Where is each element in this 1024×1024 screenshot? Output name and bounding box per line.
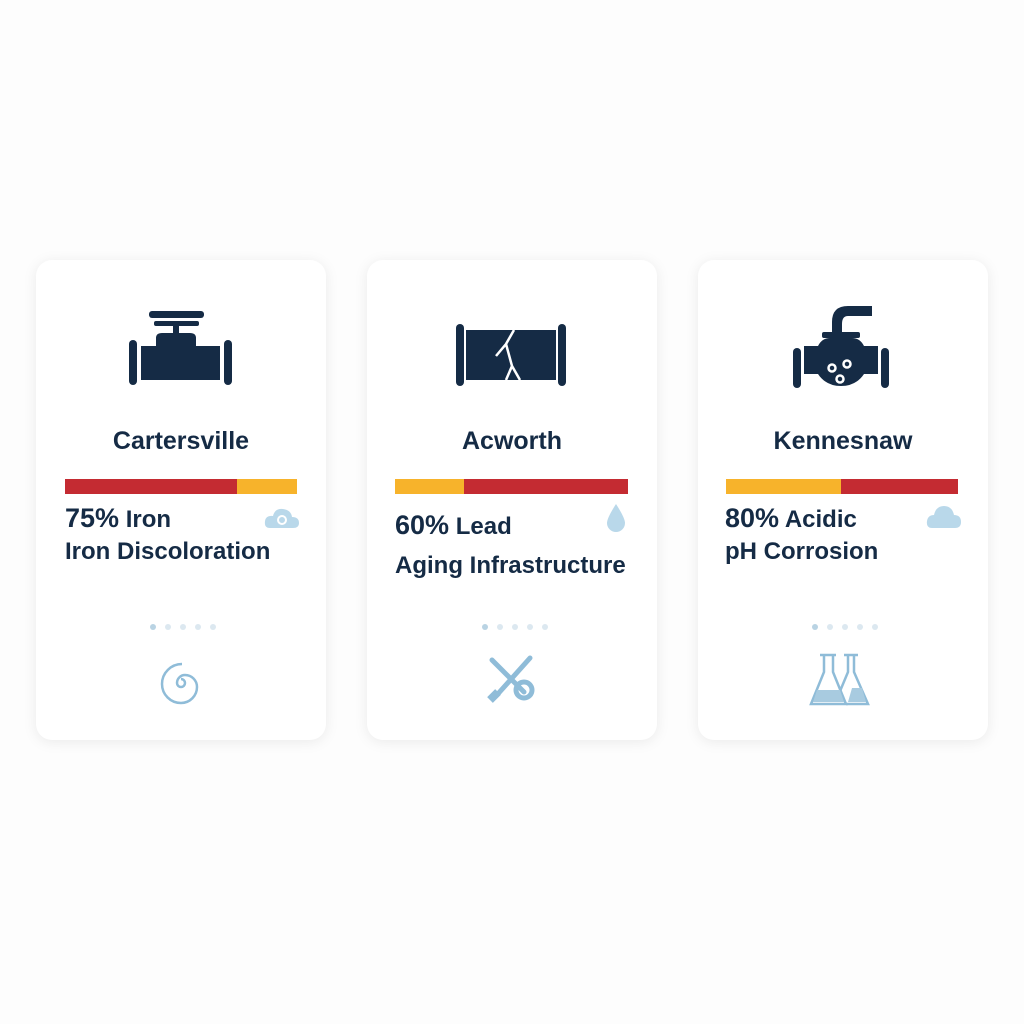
label: Iron Discoloration: Iron Discoloration [65,538,270,565]
bar: Acworth [395,479,628,494]
icon: cloud [926,506,961,528]
stat: 80% Acidic: 80% Acidic [725,503,857,533]
icon: cracked pipe [456,324,566,386]
label: Aging Infrastructure: Aging Infrastructure [395,552,626,579]
icon: swirl [160,662,198,704]
title: Acworth: Acworth [462,427,562,455]
icon: valve pipe [129,311,232,385]
card: Acworth [367,260,657,740]
card: Kennesnaw [698,260,988,740]
title: Kennesnaw: Kennesnaw [774,427,912,455]
title: Cartersville: Cartersville [113,427,249,455]
icon: cloud [264,508,299,528]
icon: tools [487,656,534,703]
dots [812,624,878,630]
label: pH Corrosion: pH Corrosion [725,538,878,565]
dots [482,624,548,630]
icon: flasks [809,654,870,706]
icon: valve with bubbles [793,306,889,388]
bar: Kennesnaw [726,479,958,494]
card: Cartersville [36,260,326,740]
icon: drop [607,504,625,532]
dots [150,624,216,630]
stat: 75% Iron: 75% Iron [65,503,171,533]
bar: Cartersville [65,479,297,494]
stat: 60% Lead: 60% Lead [395,510,512,540]
